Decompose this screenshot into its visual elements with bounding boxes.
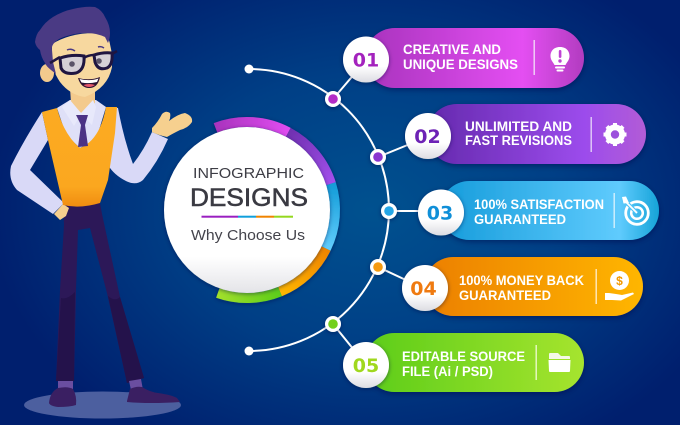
- node 02: [370, 149, 386, 165]
- label: [403, 42, 518, 72]
- tie: [76, 115, 88, 147]
- main arc connector: [249, 69, 389, 351]
- colour rule: [202, 216, 293, 218]
- icon: folder: [548, 353, 570, 372]
- icon: coin in hand: [605, 271, 634, 300]
- pill: [427, 104, 646, 164]
- number badge: [418, 190, 464, 236]
- divider: [614, 193, 615, 228]
- divider: [590, 117, 592, 152]
- node 03: [381, 203, 397, 219]
- divider: [536, 345, 537, 380]
- face: [52, 33, 112, 97]
- number badge: 02: [414, 126, 441, 148]
- node 05: [325, 316, 341, 332]
- heading: INFOGRAPHIC: [193, 165, 304, 182]
- panel: 02 unlimited and fast revisions: [405, 104, 646, 164]
- socks: [58, 379, 143, 390]
- subject: DESIGNS: [190, 184, 308, 212]
- icon: target: [622, 196, 648, 224]
- number badge: [343, 342, 389, 388]
- number badge: 01: [353, 50, 379, 72]
- label: [465, 119, 572, 148]
- number badge: [343, 36, 389, 82]
- node 01: [325, 91, 341, 107]
- label: [459, 273, 584, 303]
- pill: [440, 181, 659, 240]
- vest: [42, 107, 117, 207]
- label: UNLIMITED AND: [465, 119, 572, 134]
- glasses: [50, 51, 117, 73]
- label: CREATIVE AND: [403, 42, 501, 57]
- collar: [62, 100, 96, 126]
- arc end dot top: [244, 64, 254, 74]
- tagline: Why Choose Us: [191, 227, 305, 244]
- right arm: [108, 107, 168, 183]
- pill: [424, 257, 643, 316]
- divider: [534, 40, 535, 75]
- ear: [40, 64, 54, 82]
- label: FAST REVISIONS: [465, 133, 572, 148]
- panel: 03 satisfaction guaranteed: [418, 181, 659, 240]
- divider: [596, 269, 597, 304]
- node 04: [370, 259, 386, 275]
- arc end dot bottom: [244, 346, 254, 356]
- left arm: [10, 112, 64, 214]
- icon: gear: [604, 123, 626, 146]
- icon: coin in hand: $: [616, 274, 623, 288]
- left hand: [54, 204, 69, 220]
- icon: light bulb: [550, 47, 570, 72]
- shoes: [49, 387, 180, 407]
- label: [402, 349, 525, 379]
- label: GUARANTEED: [474, 212, 566, 227]
- connector lines: [333, 72, 420, 350]
- number badge: [402, 265, 448, 311]
- label: FILE (Ai / PSD): [402, 364, 493, 379]
- panel: 05 editable source file: [343, 333, 584, 392]
- floor shadow: [24, 392, 181, 418]
- label: GUARANTEED: [459, 288, 551, 303]
- number badge: 04: [410, 278, 437, 300]
- pill: [365, 28, 584, 88]
- character illustration: [10, 7, 192, 418]
- label: 100% MONEY BACK: [459, 273, 584, 288]
- eyebrows: [67, 47, 104, 51]
- label: 100% SATISFACTION: [474, 197, 604, 212]
- label: EDITABLE SOURCE: [402, 349, 525, 364]
- neck: [70, 88, 95, 114]
- central badge: [164, 122, 335, 298]
- label: UNIQUE DESIGNS: [403, 57, 518, 72]
- mouth: [78, 77, 100, 88]
- shirt: [57, 100, 106, 148]
- right hand: [152, 112, 192, 137]
- number badge: 05: [353, 355, 379, 377]
- panel: 04 money back guaranteed: [402, 257, 643, 316]
- number badge: 03: [427, 202, 453, 224]
- number badge: [405, 113, 451, 159]
- trousers: [56, 203, 144, 383]
- segmented ring: [216, 122, 335, 298]
- pill: [365, 333, 584, 392]
- label: [474, 197, 604, 227]
- white disc: [164, 127, 330, 293]
- panel: 01 creative and unique designs: [343, 28, 584, 88]
- hair: [35, 7, 110, 74]
